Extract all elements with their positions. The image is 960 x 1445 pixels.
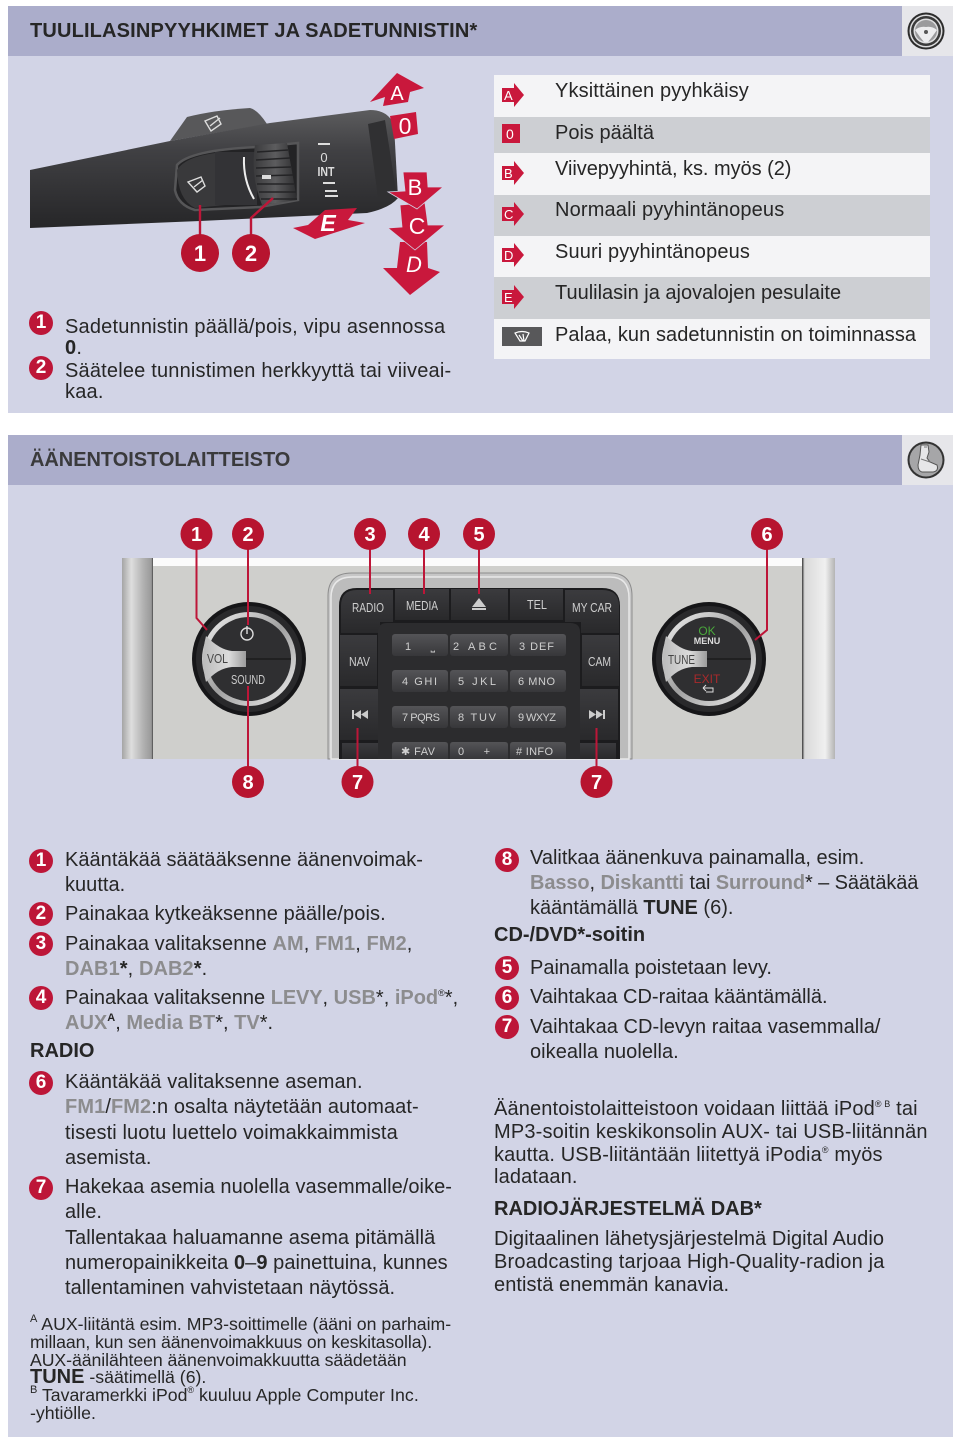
item 6: 6 [36,1072,46,1093]
paragraph: DAB: Digitaalinen lähetysjärjestelmä Digital Audio [494,1228,884,1250]
button labels: TEL [527,597,547,612]
arrow A [370,73,424,106]
button labels: 5 JKL [458,676,496,688]
row wiper indicator: Palaa, kun sadetunnistin on toiminnassa [555,324,916,346]
item 3: Painakaa valitaksenne AM, FM1, FM2, [65,933,412,955]
item 4: Painakaa valitaksenne LEVY, USB*, iPod®*, [65,987,458,1009]
icon: steering wheel [902,6,953,56]
arrow C: C [409,213,425,239]
row A: A [504,88,513,103]
item 7 CD: oikealla nuolella. [530,1041,679,1063]
audio control panel photo [122,518,835,798]
paragraph: DAB [494,1228,885,1296]
panel: audio system [8,435,953,1437]
paragraph: iPod connection: kautta. USB-liitäntään liitettyä iPodia® myös [494,1144,883,1166]
item 4: AUXA, Media BT*, TV*. [65,1012,273,1034]
item 7: 7 [36,1177,46,1198]
callout numbers: 6 [761,524,773,546]
footnotes: millaan, kun sen äänenvoimakkuus on keskitasolla). [30,1332,432,1352]
stalk labels: 0 [320,150,328,165]
button labels: 3 DEF [519,641,554,653]
paragraph: iPod connection: Äänentoistolaitteistoon voidaan liittää iPod® B tai [494,1098,918,1120]
item 7: Tallentakaa haluamanne asema pitämällä [65,1226,435,1248]
row A [494,75,930,117]
item 8: Valitkaa äänenkuva painamalla, esim. [530,847,864,869]
item 6: asemista. [65,1147,152,1169]
icon: wiper on tab [205,116,221,131]
row B [494,153,930,195]
legend 1: rain sensor on/off: Sadetunnistin päällä/pois, vipu asennossa [65,316,445,338]
callout 1 [181,234,219,272]
item 6 CD: 6 [502,987,512,1008]
volume knob: VOL [207,652,228,666]
footnotes: B Tavaramerkki iPod® kuuluu Apple Computer Inc. [30,1384,419,1405]
subheading: CD/DVD: CD-/DVD*-soitin [494,924,645,946]
item 7 CD: Vaihtakaa CD-levyn raitaa vasemmalla/ [530,1016,881,1038]
button labels: MY CAR [572,600,612,615]
button labels: CAM [588,654,611,669]
arrow E [293,208,365,239]
paragraph: iPod connection: ladataan. [494,1166,578,1188]
item 2: 2 [36,903,46,924]
item 3: DAB1*, DAB2*. [65,958,207,980]
footnotes [30,1313,451,1423]
callout 1: 1 [194,241,206,266]
stalk labels [318,143,338,197]
item 7: tallentaminen vahvistetaan näytössä. [65,1277,395,1299]
item 6 [29,1071,419,1169]
item 7 CD: 7 [502,1016,512,1037]
tune knob: MENU [694,636,720,646]
row 0: Pois päältä [555,122,654,144]
heading bar: wipers [8,6,902,56]
button labels [349,597,612,758]
volume knob: SOUND [231,672,265,687]
callout numbers: 8 [242,772,254,794]
tune knob: TUNE [668,652,695,667]
heading bar: audio [8,435,902,485]
item 8: 8 [502,849,512,870]
wiper stalk illustration [30,73,444,295]
callout numbers: 7 [352,772,363,794]
callout numbers: 3 [364,524,376,546]
item 6: Kääntäkää valitaksenne aseman. [65,1071,363,1093]
arrow B: B [408,175,422,200]
item 1: Kääntäkää säätääksenne äänenvoimak- [65,849,423,871]
item 8: kääntämällä TUNE (6). [530,897,733,919]
item 4 [29,986,458,1034]
item 7: alle. [65,1201,102,1223]
callout lines [200,198,273,240]
item 6: FM1/FM2:n osalta näytetään automaat- [65,1096,419,1118]
icon: seat [902,435,953,485]
box 0: 0 [399,113,411,139]
row D: D [504,248,513,263]
item 5: Painamalla poistetaan levy. [530,957,772,979]
legend 1: rain sensor on/off: 1 [36,312,46,333]
button labels: NAV [349,654,370,669]
paragraph: iPod connection [494,1098,928,1188]
row E: Tuulilasin ja ajovalojen pesulaite [555,282,841,304]
row 0: 0 [506,126,514,142]
callout 2 [232,234,270,272]
row D: Suuri pyyhintänopeus [555,241,750,263]
row wiper indicator [494,319,930,359]
legend 1: rain sensor on/off [29,311,446,359]
heading bar: audio: ÄÄNENTOISTOLAITTEISTO [30,449,290,471]
item 6: tisesti luotu luettelo voimakkaimmista [65,1122,398,1144]
row C: C [504,207,513,222]
callout lines [196,534,767,782]
row 0 [494,117,930,153]
paragraph: iPod connection: MP3-soitin keskikonsolin AUX- tai USB-liitännän [494,1121,928,1143]
button labels: 0 + [458,746,490,758]
row D [494,236,930,277]
button labels: 2 ABC [453,641,497,653]
row B: Viivepyyhintä, ks. myös (2) [555,158,791,180]
arrow A: A [390,83,404,105]
row B: B [504,166,513,181]
item 1 [29,849,423,896]
heading bar: wipers: TUULILASINPYYHKIMET JA SADETUNNISTIN* [30,20,477,42]
button labels: 9 WXYZ [518,712,556,724]
arrow B [388,172,443,209]
arrow D: D [406,252,422,277]
item 7: Hakekaa asemia nuolella vasemmalle/oike- [65,1176,452,1198]
arrow C [388,203,445,250]
icon: wiper on stalk [188,177,205,192]
footnotes: AUX-äänilähteen äänenvoimakkuutta säädetään [30,1350,407,1370]
callout circles [180,518,783,798]
stalk labels: INT [318,164,335,179]
item 1: kuutta. [65,874,125,896]
subheading: radio: RADIO [30,1040,94,1062]
tune knob: EXIT [694,672,721,686]
subheading: DAB: RADIOJÄRJESTELMÄ DAB* [494,1198,762,1220]
footnotes: TUNE -säätimellä (6). [30,1366,206,1388]
button labels: ✱ FAV [401,746,436,758]
row A: Yksittäinen pyyhkäisy [555,80,749,102]
button labels: 6 MNO [518,676,555,688]
callout numbers [191,524,773,794]
legend 2: sensitivity: kaa. [65,381,104,403]
item 7 [29,1176,452,1299]
legend 1: rain sensor on/off: 0. [65,337,82,359]
arrow D [383,242,440,295]
button cluster surround [328,573,632,759]
row E [494,277,930,319]
button labels: # INFO [516,746,553,758]
callout numbers: 2 [242,524,254,546]
arrow E: E [320,210,336,236]
item 5: 5 [502,957,512,978]
legend 2: sensitivity: Säätelee tunnistimen herkkyyttä tai viiveai- [65,360,451,382]
callout numbers: 7 [591,772,602,794]
button labels: MEDIA [406,598,438,613]
panel: wipers and rain sensor [8,6,953,413]
item 3: 3 [36,933,46,954]
callout numbers: 4 [418,524,430,546]
volume knob [192,602,306,716]
item 4: 4 [36,987,46,1008]
item 8 [495,847,918,919]
callout numbers: 1 [191,524,202,546]
item 7 CD [495,1015,881,1063]
callout numbers: 5 [473,524,485,546]
row E: E [504,290,513,305]
legend 2: sensitivity: 2 [36,357,46,378]
tune knob [652,602,766,716]
footnotes: A AUX-liitäntä esim. MP3-soittimelle (ääni on parhaim- [30,1313,451,1334]
footnotes: -yhtiölle. [30,1403,96,1423]
item 3 [29,932,412,980]
button labels: 1 ⎵ [405,641,436,653]
paragraph: DAB: Broadcasting tarjoaa High-Quality-radion ja [494,1251,885,1273]
row C: Normaali pyyhintänopeus [555,199,784,221]
item 8: Basso, Diskantti tai Surround* – Säätäkää [530,872,918,894]
row C [494,195,930,236]
item 6 CD: Vaihtakaa CD-raitaa kääntämällä. [530,986,828,1008]
paragraph: DAB: entistä enemmän kanavia. [494,1274,729,1296]
item 1: 1 [36,850,46,871]
button labels: 7 PQRS [402,712,440,724]
tune knob: OK [698,624,716,638]
keypad keys [392,634,566,759]
button labels: 8 TUV [458,712,497,724]
button labels: 4 GHI [402,676,437,688]
wiper function table [494,75,930,359]
callout 2: 2 [245,241,257,266]
item 2: Painakaa kytkeäksenne päälle/pois. [65,903,386,925]
legend 2: sensitivity [29,356,451,403]
item 7: numeropainikkeita 0–9 painettuina, kunnes [65,1252,448,1274]
button labels: RADIO [352,600,384,615]
box 0 [390,112,418,139]
